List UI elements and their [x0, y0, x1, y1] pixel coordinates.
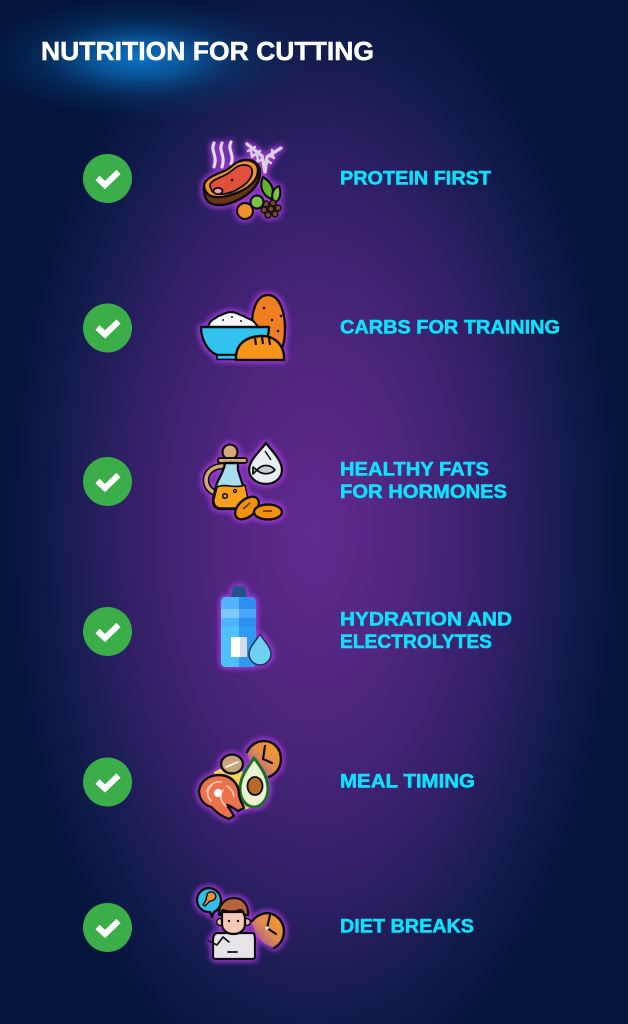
- title: NUTRITION FOR CUTTING: [41, 36, 374, 66]
- label: HEALTHY FATS: [340, 458, 489, 480]
- icon: steak, herbs and fruit: [204, 142, 281, 219]
- row: diet breaks: [83, 888, 474, 959]
- check badge: [83, 758, 132, 806]
- icon: water bottle and drop: [221, 586, 271, 667]
- label: [340, 608, 512, 653]
- label: MEAL TIMING: [340, 770, 475, 792]
- label: [340, 458, 507, 503]
- row: hydration: [83, 586, 512, 667]
- icon: salmon, avocado and clock: [199, 741, 281, 819]
- icon: person, food bubble and clock: [197, 888, 284, 959]
- icon: rice bowl and bread: [201, 295, 285, 360]
- check badge: [83, 607, 132, 656]
- check badge: [83, 457, 132, 506]
- label: ELECTROLYTES: [340, 631, 492, 653]
- label: HYDRATION AND: [340, 608, 512, 630]
- title glow: [0, 0, 310, 125]
- label: FOR HORMONES: [340, 481, 507, 503]
- check badge: [83, 304, 132, 352]
- check badge: [83, 903, 132, 952]
- icon: oil jug, fish drop and capsules: [206, 443, 282, 524]
- row: carbs for training: [83, 295, 560, 360]
- row: healthy fats: [83, 443, 507, 524]
- row: protein first: [83, 142, 491, 219]
- label: PROTEIN FIRST: [340, 168, 491, 190]
- label: DIET BREAKS: [340, 916, 474, 938]
- label: CARBS FOR TRAINING: [340, 316, 560, 338]
- row: meal timing: [83, 741, 475, 819]
- check badge: [83, 154, 132, 203]
